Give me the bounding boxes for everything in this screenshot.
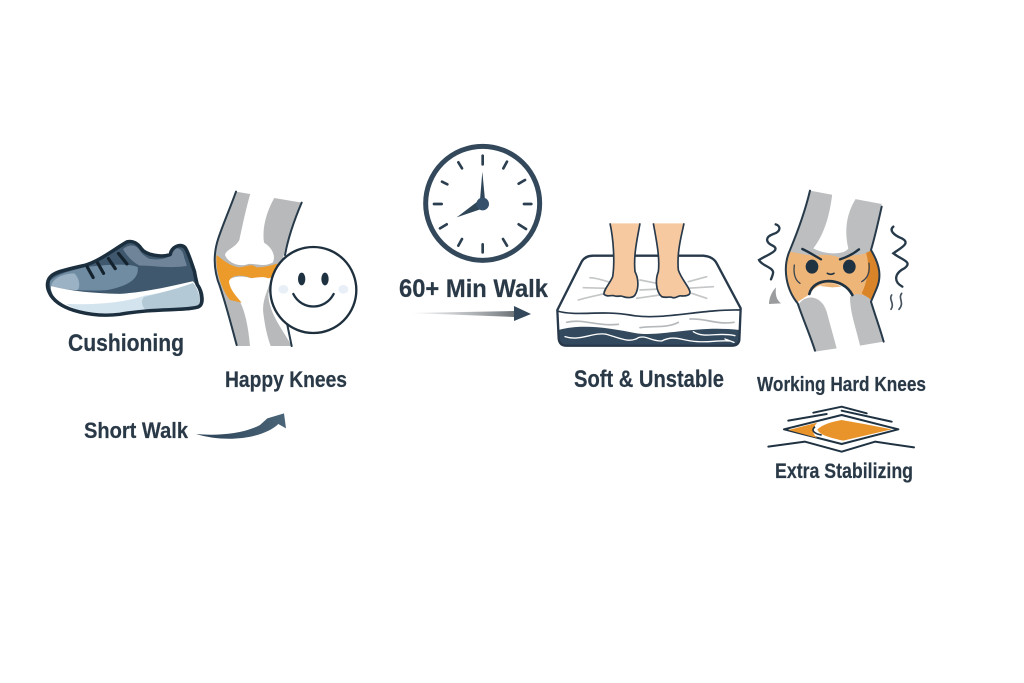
icon: clock [426,146,540,260]
label: Extra Stabilizing: Extra Stabilizing [775,460,913,483]
icon: strained knee with angry face [786,191,884,352]
knee joint fill [786,248,879,303]
icon: happy knee with smiley [215,192,356,346]
bones and cartilage [215,192,302,346]
label: 60+ Min Walk: 60+ Min Walk [399,275,548,303]
knee outline [215,192,302,346]
icon: running shoe [47,241,202,315]
mattress [557,256,741,346]
knee outline [786,191,884,351]
arrow: long walk [411,306,531,321]
left foot [604,223,640,298]
lower bone [798,297,837,352]
upper bone [790,191,882,258]
icon: feet on mattress [557,223,741,346]
arrow: short walk curve [196,413,286,439]
icon: strain squiggles [759,224,908,309]
label: Cushioning: Cushioning [68,330,184,357]
icon: stabilizing diamond layers [768,407,914,452]
label: Happy Knees: Happy Knees [225,367,347,392]
label: Soft & Unstable: Soft & Unstable [574,366,724,393]
label: Short Walk: Short Walk [84,418,189,443]
right foot [653,223,690,298]
smiley face [270,247,356,333]
angry face [794,249,869,295]
label: Working Hard Knees: Working Hard Knees [757,374,926,396]
